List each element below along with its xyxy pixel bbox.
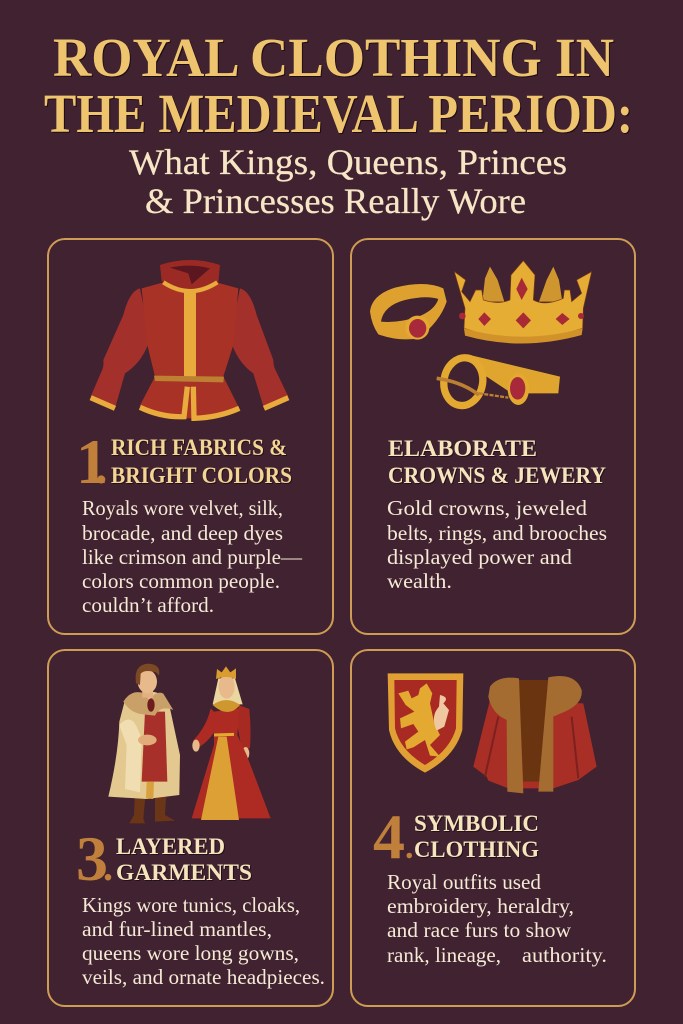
icon: king figure <box>108 664 180 823</box>
heading: rich fabrics: 1 <box>76 426 108 497</box>
panel: crowns and jewelry <box>351 239 635 634</box>
icon: red jacket with gold trim <box>91 260 288 418</box>
subtitle <box>129 142 567 221</box>
heading: symbolic clothing <box>373 801 539 872</box>
text: symbolic clothing: and race furs to show <box>387 918 572 942</box>
text: rich fabrics <box>82 496 303 617</box>
text: rich fabrics: colors common people. <box>82 569 280 593</box>
heading: rich fabrics: . <box>95 438 108 494</box>
heading: symbolic clothing: 4 <box>373 801 405 872</box>
text: layered garments: Kings wore tunics, cloaks, <box>82 893 300 917</box>
heading: crowns and jewelry: ELABORATE <box>388 436 537 461</box>
heading: layered garments <box>76 823 252 894</box>
icon: crown <box>454 261 592 343</box>
text: rich fabrics: brocade, and deep dyes <box>82 521 283 545</box>
text: crowns and jewelry: belts, rings, and brooches <box>387 521 607 545</box>
text: layered garments: queens wore long gowns, <box>82 941 299 965</box>
text: crowns and jewelry: Gold crowns, jeweled <box>387 496 588 520</box>
text: layered garments <box>82 893 325 989</box>
title: ROYAL CLOTHING IN <box>53 27 614 88</box>
subtitle: What Kings, Queens, Princes <box>129 142 567 182</box>
text: symbolic clothing: Royal outfits used <box>387 870 541 894</box>
icon: heraldic shield <box>388 673 463 773</box>
heading: layered garments: LAYERED <box>116 834 225 859</box>
text: rich fabrics: couldn’t afford. <box>82 593 214 617</box>
text: symbolic clothing <box>387 870 607 967</box>
text: symbolic clothing: rank, lineage, <box>387 943 501 967</box>
text: layered garments: veils, and ornate headpieces. <box>82 965 325 989</box>
heading: rich fabrics: RICH FABRICS & <box>111 435 287 460</box>
icon: jeweled belt <box>437 355 560 409</box>
icon: ring <box>370 284 447 340</box>
icon: fur-lined cloak <box>473 676 597 793</box>
heading: crowns and jewelry <box>388 436 606 488</box>
heading: rich fabrics: BRIGHT COLORS <box>111 463 292 488</box>
text: crowns and jewelry <box>387 496 607 593</box>
panel: symbolic clothing <box>351 650 635 1006</box>
heading: layered garments: GARMENTS <box>116 860 252 885</box>
text: crowns and jewelry: displayed power and <box>387 545 573 569</box>
panel: rich fabrics <box>48 239 333 634</box>
text: symbolic clothing: embroidery, heraldry, <box>387 894 574 918</box>
heading: rich fabrics <box>76 426 292 497</box>
heading: layered garments: 3 <box>76 823 108 894</box>
heading: layered garments: . <box>103 844 113 889</box>
heading: crowns and jewelry: CROWNS & JEWERY <box>388 463 606 488</box>
heading: symbolic clothing: . <box>405 829 414 866</box>
text: rich fabrics: like crimson and purple— <box>82 545 303 569</box>
heading: symbolic clothing: SYMBOLIC <box>414 811 539 836</box>
text: crowns and jewelry: wealth. <box>387 569 452 593</box>
icon: queen figure <box>192 666 271 820</box>
text: rich fabrics: Royals wore velvet, silk, <box>82 496 283 520</box>
text: symbolic clothing: authority. <box>522 943 607 967</box>
title <box>44 27 633 144</box>
panel: layered garments <box>48 650 333 1006</box>
text: layered garments: and fur-lined mantles, <box>82 917 272 941</box>
heading: symbolic clothing: CLOTHING <box>414 837 539 862</box>
subtitle: & Princesses Really Wore <box>145 181 526 221</box>
